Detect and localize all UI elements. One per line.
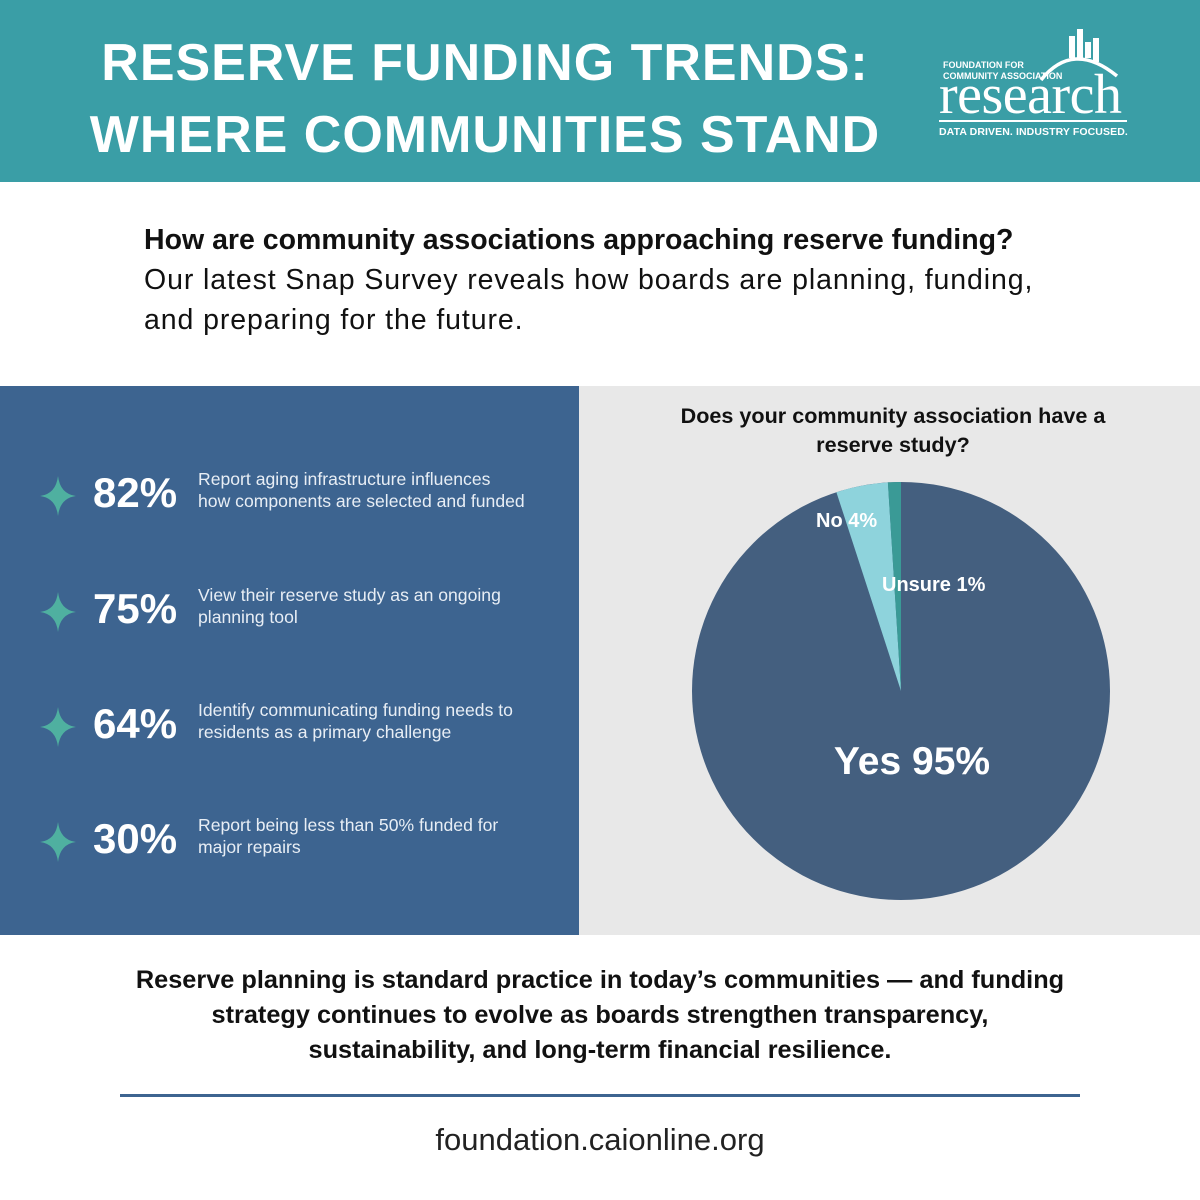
chart title: reserve study? xyxy=(816,432,970,457)
chart title: Does your community association have a xyxy=(681,403,1105,428)
logo: research xyxy=(939,64,1122,126)
stat: 64% xyxy=(40,700,513,747)
logo: DATA DRIVEN. INDUSTRY FOCUSED. xyxy=(939,126,1128,138)
intro text: How are community associations approaching reserve funding? xyxy=(144,224,1013,256)
closing statement: sustainability, and long-term financial resilience. xyxy=(309,1036,891,1064)
stat: 75%: planning tool xyxy=(198,607,298,627)
chart title xyxy=(681,403,1106,457)
intro text: and preparing for the future. xyxy=(144,304,523,336)
pie chart: Unsure 1% xyxy=(882,574,986,596)
logo: COMMUNITY ASSOCIATION xyxy=(943,71,1062,81)
stat: 75%: View their reserve study as an ongoing xyxy=(198,585,501,605)
stat: 82%: Report aging infrastructure influences xyxy=(198,469,490,489)
stat: 30% xyxy=(40,815,498,862)
intro text: Our latest Snap Survey reveals how boards are planning, funding, xyxy=(144,264,1033,296)
logo: FOUNDATION FOR xyxy=(943,60,1024,70)
logo xyxy=(939,29,1128,138)
stat: 30%: 30% xyxy=(93,815,177,862)
footer url: foundation.caionline.org xyxy=(435,1122,765,1157)
stat: 64%: residents as a primary challenge xyxy=(198,722,451,742)
intro text xyxy=(144,224,1033,336)
panel: key stats xyxy=(0,386,579,935)
stat: 82%: 82% xyxy=(93,469,177,516)
stat: 30%: major repairs xyxy=(198,837,301,857)
pie chart: Yes 95% xyxy=(834,740,990,783)
pie chart: No 4% xyxy=(816,510,877,532)
title: RESERVE FUNDING TRENDS: xyxy=(101,34,869,92)
closing statement xyxy=(136,966,1064,1064)
closing statement: strategy continues to evolve as boards strengthen transparency, xyxy=(212,1001,988,1029)
stat: 64%: 64% xyxy=(93,700,177,747)
stat: 75% xyxy=(40,585,501,632)
closing statement: Reserve planning is standard practice in today’s communities — and funding xyxy=(136,966,1064,994)
icon: logo bars and arc xyxy=(1040,29,1118,82)
title: WHERE COMMUNITIES STAND xyxy=(90,106,880,164)
stat: 30%: Report being less than 50% funded for xyxy=(198,815,498,835)
panel: pie chart xyxy=(579,386,1200,935)
stat: 64%: Identify communicating funding needs to xyxy=(198,700,513,720)
pie chart xyxy=(692,482,1110,900)
title xyxy=(90,34,880,164)
stat: 75%: 75% xyxy=(93,585,177,632)
header band xyxy=(0,0,1200,182)
stat: 82% xyxy=(40,469,525,516)
stat: 82%: how components are selected and funded xyxy=(198,491,525,511)
